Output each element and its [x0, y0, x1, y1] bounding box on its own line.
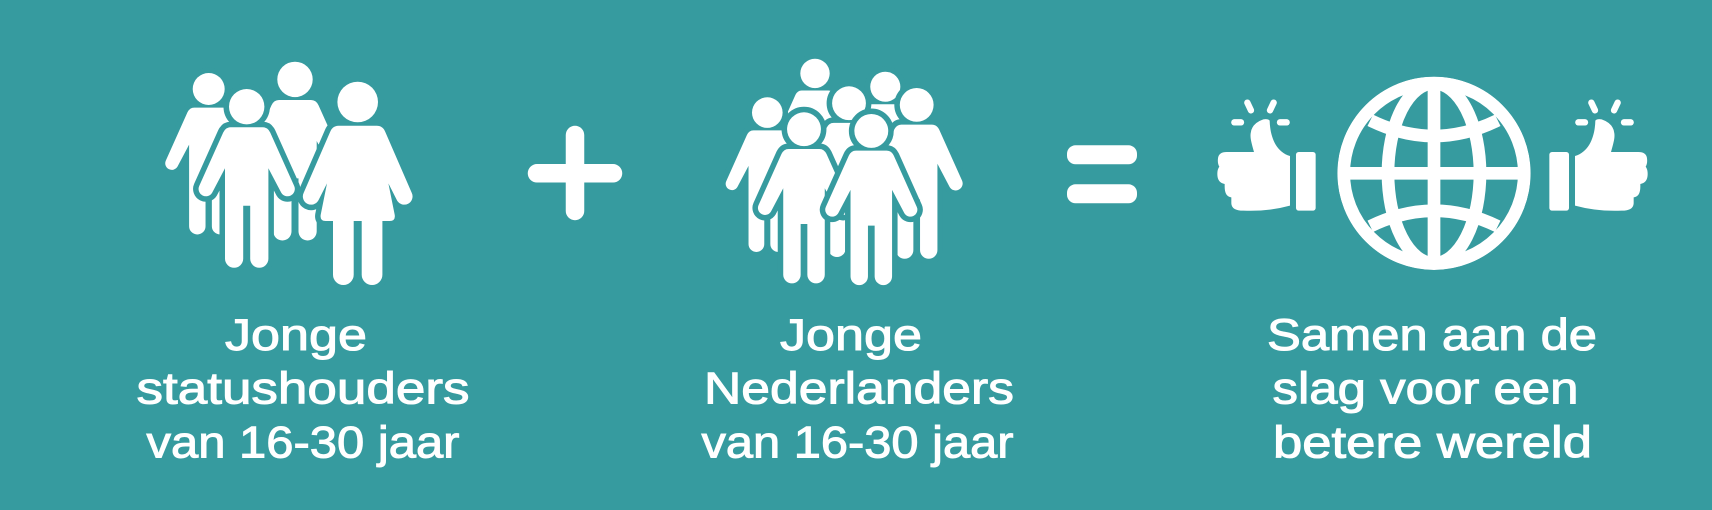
person: woman front right [303, 82, 413, 285]
text: samen aan de slag: betere wereld [1273, 418, 1592, 467]
person: back top right [844, 72, 926, 224]
icon: equals sign [1067, 145, 1137, 203]
person: back top left [775, 59, 855, 207]
icon: group of young status holders [165, 62, 413, 285]
person: far left [726, 97, 809, 252]
infographic [137, 58, 1648, 468]
text: jonge nederlanders: van 16-30 jaar [702, 418, 1014, 467]
text: jonge nederlanders: Nederlanders [704, 364, 1014, 413]
icon: thumb up right [1549, 103, 1648, 211]
text: jonge statushouders: Jonge [225, 311, 367, 360]
text: jonge statushouders [136, 311, 470, 467]
icon: thumb up left [1217, 103, 1316, 211]
icon: group of young Dutch people [726, 59, 963, 285]
text: samen aan de slag: Samen aan de [1267, 311, 1597, 360]
text: samen aan de slag [1267, 311, 1597, 467]
text: samen aan de slag: slag voor een [1272, 364, 1578, 413]
person: far right [871, 88, 963, 259]
icon: plus sign [537, 135, 613, 211]
text: jonge nederlanders [702, 311, 1014, 467]
person: front right [825, 114, 917, 285]
text: jonge nederlanders: Jonge [780, 311, 922, 360]
person: front centre [199, 89, 295, 268]
text: jonge statushouders: van 16-30 jaar [146, 418, 460, 467]
text: jonge statushouders: statushouders [136, 364, 470, 413]
person: front left [758, 112, 850, 283]
person: back left [165, 73, 252, 234]
icon: globe [1344, 83, 1524, 264]
person: back centre [247, 62, 343, 240]
person: middle [803, 86, 895, 257]
